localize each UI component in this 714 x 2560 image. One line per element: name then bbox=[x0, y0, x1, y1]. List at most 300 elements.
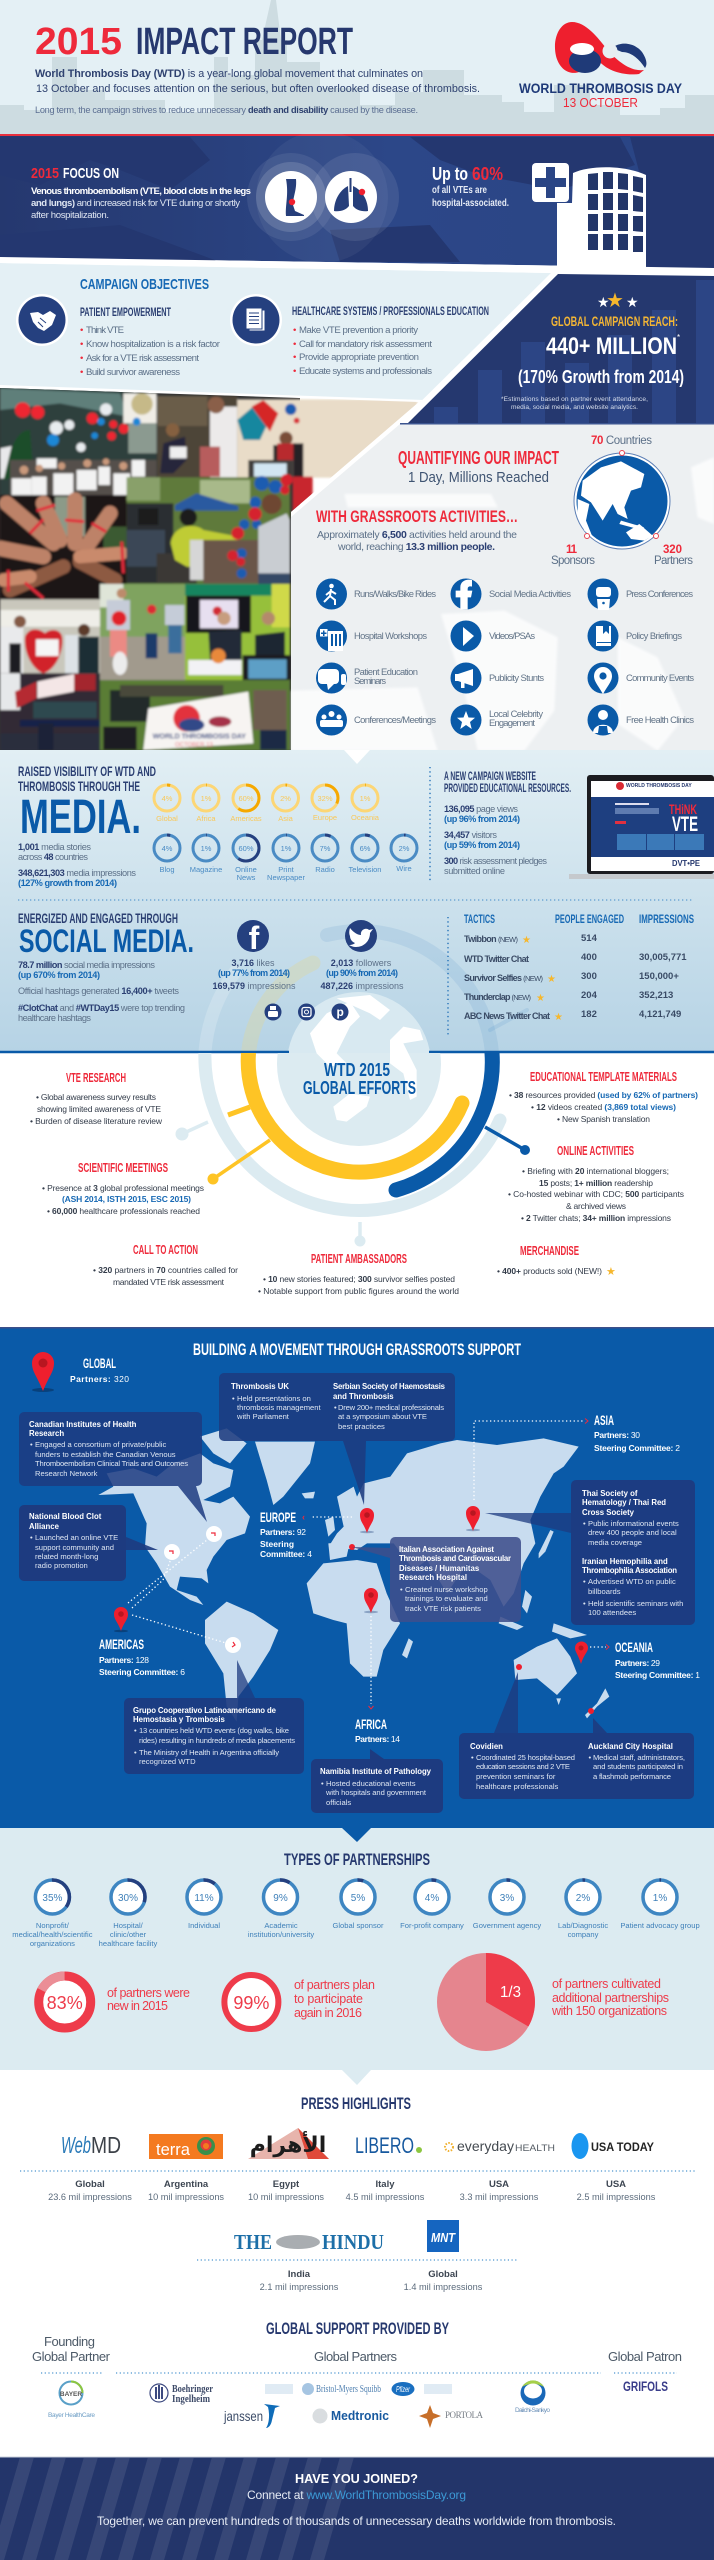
activity: hospital workshops bbox=[316, 620, 427, 652]
icon: twitter with stats: 2,013 followers bbox=[331, 958, 392, 968]
intro text: Long term, the campaign strives to reduce unnecessary death and disability caused by the disease. bbox=[35, 105, 418, 115]
objective: healthcare systems: • bbox=[293, 325, 296, 336]
callout: Italian Association: trainings to evaluate and bbox=[405, 1594, 488, 1603]
logo: Medtronic bbox=[312, 2408, 389, 2424]
callout: Thai and Iranian societies bbox=[485, 1480, 695, 1625]
objective: patient empowerment: • bbox=[80, 353, 83, 364]
activity: patient education seminars: Patient Education bbox=[354, 666, 418, 677]
activity: community events bbox=[588, 662, 694, 694]
callout: Covidien and Auckland City Hospital: prevention seminars for bbox=[476, 1772, 556, 1781]
intro text: 13 October and focuses attention on the serious, but often overlooked disease of thrombosis. bbox=[36, 83, 480, 95]
callout: National Blood Clot Alliance: Alliance bbox=[29, 1522, 60, 1531]
callout: Italian Association: track VTE risk patients bbox=[405, 1604, 481, 1613]
callout: Thrombosis UK and Serbian Society bbox=[219, 1373, 455, 1505]
callout: Grupo Cooperativo: • bbox=[134, 1748, 137, 1757]
title bbox=[35, 21, 353, 63]
chart: media by region: Americas bbox=[230, 814, 262, 823]
chart: media by region: Oceania bbox=[351, 813, 380, 822]
city skyline bbox=[0, 0, 714, 134]
chart: media by type: 60% bbox=[238, 844, 254, 853]
callout: Grupo Cooperativo: The Ministry of Health in Argentina officially bbox=[139, 1748, 279, 1757]
social tactics table: Survivor Selfies (NEW) bbox=[464, 973, 544, 983]
callout: Canadian Institutes: Research Network bbox=[35, 1469, 98, 1478]
icons: youtube instagram pinterest bbox=[264, 1004, 348, 1020]
globe top bbox=[287, 992, 431, 1136]
activity: social media bbox=[450, 578, 571, 610]
callout: Covidien and Auckland City Hospital: and students participated in bbox=[593, 1762, 683, 1771]
logo: terra bbox=[149, 2134, 223, 2159]
chart: 83% new partners: 83% bbox=[47, 1993, 83, 2013]
activity: runs walks bike rides bbox=[316, 578, 436, 610]
chart: partnership types: 4% bbox=[425, 1893, 439, 1904]
effort: scientific meetings: (ASH 2014, ISTH 2015, ESC 2015) bbox=[62, 1194, 191, 1204]
chart: media by type: Radio bbox=[315, 865, 335, 874]
reach figures: *Estimations based on partner event attendance, bbox=[501, 396, 648, 403]
media stats: across 48 countries bbox=[18, 852, 88, 862]
chart: partnership types: 5% bbox=[351, 1893, 365, 1904]
focus heading: 2015 bbox=[31, 165, 59, 182]
activity: press conferences bbox=[588, 578, 693, 610]
chart: media by region bbox=[154, 785, 380, 823]
icon: twitter with stats bbox=[320, 920, 404, 991]
callout: Covidien and Auckland City Hospital: healthcare professionals bbox=[476, 1782, 559, 1791]
media heading: MEDIA. bbox=[20, 791, 141, 844]
effort: merchandise bbox=[497, 1243, 616, 1278]
panel: global support bbox=[32, 2319, 682, 2428]
social tactics table: ★ bbox=[554, 1012, 563, 1023]
media stats: (127% growth from 2014) bbox=[18, 878, 117, 888]
globe with stats: 11 bbox=[566, 544, 578, 556]
social media stats: #ClotChat and #WTDay15 were top trending bbox=[18, 1003, 185, 1013]
chart: partnership types: company bbox=[568, 1930, 599, 1939]
efforts title: WTD 2015 bbox=[324, 1060, 390, 1080]
chart: media by region: 2% bbox=[280, 794, 291, 803]
laptop showing website: VTE bbox=[672, 813, 698, 836]
I billboard bbox=[0, 673, 100, 751]
icon: facebook with stats: 169,579 impressions bbox=[212, 981, 296, 991]
focus text bbox=[31, 186, 251, 221]
logo: The Hindu: HINDU bbox=[322, 2230, 384, 2254]
chart: media by region: 4% bbox=[162, 794, 173, 803]
logo: Portola bbox=[419, 2405, 484, 2428]
Oceania stat and pin: Steering Committee: 1 bbox=[615, 1670, 700, 1680]
chart: 99% return bbox=[224, 1975, 375, 2029]
chart: partnership types: healthcare facility bbox=[99, 1939, 158, 1948]
objective: healthcare systems bbox=[292, 306, 489, 377]
callout: National Blood Clot Alliance: related month-long bbox=[35, 1552, 98, 1561]
activity: press conferences: Press Conferences bbox=[626, 588, 693, 599]
logo: Daiichi-Sankyo: Daiichi-Sankyo bbox=[515, 2407, 550, 2414]
press figures row two: Global bbox=[428, 2269, 458, 2280]
callout: Thai and Iranian societies: media coverage bbox=[588, 1538, 642, 1547]
effort: scientific meetings: • Presence at 3 global professional meetings bbox=[42, 1183, 204, 1193]
grassroots heading: Approximately 6,500 activities held around the bbox=[317, 529, 517, 541]
activity: patient education seminars: Seminars bbox=[354, 675, 386, 686]
panel: types of partnerships bbox=[0, 1828, 714, 2085]
chart: partnership types: organizations bbox=[30, 1939, 75, 1948]
chart: one third pie: additional partnerships bbox=[552, 1991, 669, 2005]
activity: policy briefings: Policy Briefings bbox=[626, 630, 682, 641]
chart: partnership types: Government agency bbox=[473, 1921, 541, 1930]
chart: media by type: Blog bbox=[159, 865, 175, 874]
media heading: RAISED VISIBILITY OF WTD AND bbox=[18, 763, 156, 779]
callout: National Blood Clot Alliance: support community and bbox=[35, 1543, 114, 1552]
logo: Boehringer Ingelheim bbox=[150, 2383, 213, 2405]
chart: media by region: 60% bbox=[238, 794, 254, 803]
chart: 99% return: to participate bbox=[294, 1992, 363, 2006]
media heading bbox=[18, 763, 156, 844]
campaign website stats: PROVIDED EDUCATIONAL RESOURCES. bbox=[444, 783, 571, 795]
laptop showing website: DVT•PE bbox=[672, 859, 701, 868]
Europe stat: Steering bbox=[260, 1539, 294, 1549]
activity: community events: Community Events bbox=[626, 672, 694, 683]
social media stats: Official hashtags generated 16,400+ tweets bbox=[18, 986, 179, 996]
effort: patient ambassadors: • Notable support from public figures around the world bbox=[258, 1286, 459, 1296]
activity: conferences and meetings bbox=[316, 704, 436, 736]
media stats: 348,621,303 media impressions bbox=[18, 868, 136, 878]
icon: facebook with stats: f bbox=[249, 920, 260, 956]
icon: leg and lungs bbox=[247, 131, 399, 263]
Asia stat and pin: ASIA bbox=[594, 1412, 614, 1428]
callout: Covidien and Auckland City Hospital: • bbox=[588, 1753, 592, 1762]
icon: facebook with stats: 3,716 likes bbox=[231, 958, 275, 968]
chart: media by region: 1% bbox=[360, 794, 371, 803]
chart: partnership types: 2% bbox=[576, 1893, 590, 1904]
callout: Canadian Institutes: Research bbox=[29, 1429, 64, 1438]
efforts title bbox=[303, 1060, 416, 1098]
logo: Bristol-Myers Squibb and Pfizer: Pfizer bbox=[396, 2385, 410, 2394]
callout: Covidien and Auckland City Hospital: education sessions and 2 VTE bbox=[476, 1762, 570, 1771]
effort: online activities: • 2 Twitter chats; 34+ million impressions bbox=[521, 1213, 671, 1223]
logo: Al-Ahram: الأهرام bbox=[250, 2130, 326, 2158]
logo: everyday health: HEALTH bbox=[515, 2143, 555, 2154]
callout: Thai and Iranian societies: billboards bbox=[588, 1587, 621, 1596]
callout: Covidien and Auckland City Hospital bbox=[459, 1664, 694, 1799]
chart: one third pie: with 150 organizations bbox=[551, 2004, 667, 2018]
Asia stat and pin: Partners: 30 bbox=[594, 1430, 640, 1440]
social media stats: healthcare hashtags bbox=[18, 1013, 91, 1023]
chart: media by region: Global bbox=[156, 814, 178, 823]
logo: MNT: MNT bbox=[431, 2230, 456, 2245]
chart: media by type: 1% bbox=[281, 844, 292, 853]
reach figures: 440+ MILLION bbox=[546, 333, 677, 360]
callout: Italian Association bbox=[352, 1537, 521, 1622]
social media heading: ENERGIZED AND ENGAGED THROUGH bbox=[18, 910, 178, 926]
effort: online activities: • Briefing with 20 international bloggers; bbox=[522, 1166, 669, 1176]
global stat bbox=[32, 1352, 129, 1392]
campaign website stats bbox=[444, 771, 571, 876]
callout: Thrombosis UK and Serbian Society: Held presentations on bbox=[237, 1394, 311, 1403]
Europe stat: Committee: 4 bbox=[260, 1549, 312, 1559]
photo collage of campaign events: OCTOBER 13 bbox=[175, 743, 213, 749]
callout: Thrombosis UK and Serbian Society: • bbox=[334, 1403, 337, 1412]
chart: one third pie bbox=[437, 1953, 669, 2051]
objective: healthcare systems: • bbox=[293, 339, 296, 350]
callout: Italian Association: Italian Association Against bbox=[399, 1545, 494, 1554]
up to 60% stat bbox=[432, 164, 509, 209]
effort: call to action: mandated VTE risk assessment bbox=[113, 1277, 225, 1287]
social tactics table: 204 bbox=[581, 990, 598, 1001]
press figures row one: 10 mil impressions bbox=[148, 2192, 224, 2202]
chart: partnership types: Hospital/ bbox=[113, 1921, 144, 1930]
effort: VTE research: • Global awareness survey results bbox=[36, 1092, 156, 1102]
objective: patient empowerment: • bbox=[80, 339, 83, 350]
globe with stats: Partners bbox=[654, 555, 693, 567]
logo: World Thrombosis Day bbox=[519, 22, 682, 110]
chart: one third pie: of partners cultivated bbox=[552, 1977, 661, 1991]
callout: National Blood Clot Alliance bbox=[19, 1505, 158, 1581]
supporter tier labels bbox=[32, 2334, 682, 2364]
campaign website stats: (up 59% from 2014) bbox=[444, 840, 520, 850]
objective: patient empowerment bbox=[80, 307, 221, 378]
callout: Thai and Iranian societies: Thai Society of bbox=[582, 1489, 638, 1498]
logo: everyday health bbox=[445, 2138, 555, 2154]
globe with stats bbox=[551, 435, 693, 567]
Oceania stat and pin: OCEANIA bbox=[615, 1639, 653, 1655]
world map bbox=[98, 1428, 609, 1722]
chart: 83% new partners: of partners were bbox=[107, 1986, 190, 2000]
callout: National Blood Clot Alliance: radio promotion bbox=[35, 1561, 88, 1570]
logo: Portola: PORTOLA bbox=[445, 2410, 484, 2420]
chart: partnership types: 9% bbox=[273, 1893, 288, 1904]
press figures row one: Global bbox=[75, 2179, 105, 2190]
concentric rings and globe bbox=[176, 1053, 530, 1246]
callout: Thai and Iranian societies: Hematology / Thai Red bbox=[582, 1498, 666, 1507]
press figures row one bbox=[48, 2179, 656, 2202]
logo: World Thrombosis Day: 13 OCTOBER bbox=[563, 95, 638, 110]
supporter tier labels: Global Partner bbox=[32, 2349, 111, 2364]
chart: media by type: 6% bbox=[360, 844, 371, 853]
effort: merchandise: ★ bbox=[606, 1266, 616, 1278]
Europe stat: EUROPE bbox=[260, 1509, 296, 1525]
Oceania stat and pin: Partners: 29 bbox=[615, 1658, 660, 1668]
supporter tier labels: Global Partners bbox=[314, 2349, 398, 2364]
logo: Bayer: Bayer HealthCare bbox=[48, 2412, 95, 2419]
logo: Bayer: BAYER bbox=[60, 2391, 82, 2398]
social tactics table: ★ bbox=[522, 935, 531, 946]
focus heading bbox=[31, 165, 119, 182]
callout: National Blood Clot Alliance: National Blood Clot bbox=[29, 1512, 102, 1521]
logo: Boehringer Ingelheim: Ingelheim bbox=[172, 2393, 210, 2405]
globe with stats: 70 Countries bbox=[591, 435, 652, 447]
logo: The Hindu: THE bbox=[234, 2230, 272, 2254]
activity: patient education seminars bbox=[316, 662, 418, 694]
Asia stat and pin: Steering Committee: 2 bbox=[594, 1443, 680, 1453]
grassroots heading: WITH GRASSROOTS ACTIVITIES… bbox=[316, 507, 518, 526]
social tactics table: ABC News Twitter Chat bbox=[464, 1011, 550, 1021]
campaign website stats: submitted online bbox=[444, 866, 505, 876]
activity: local celebrity engagement: Engagement bbox=[489, 717, 535, 728]
activity: publicity stunts bbox=[450, 662, 544, 694]
Europe stat: Partners: 92 bbox=[260, 1527, 306, 1537]
icons: youtube instagram pinterest: p bbox=[336, 1005, 344, 1019]
E interview bbox=[127, 477, 290, 584]
objective: patient empowerment: Know hospitalization is a risk factor bbox=[86, 339, 221, 350]
callout: Canadian Institutes bbox=[19, 1412, 207, 1522]
logo: Janssen: janssen bbox=[223, 2408, 263, 2424]
Americas stat: Partners: 128 bbox=[99, 1655, 149, 1665]
activity icon grid bbox=[316, 578, 694, 736]
up to 60% stat: 60% bbox=[472, 164, 503, 184]
chart: partnership types: Patient advocacy group bbox=[620, 1921, 700, 1930]
logo: USA Today bbox=[572, 2133, 654, 2159]
activity: publicity stunts: Publicity Stunts bbox=[489, 672, 544, 683]
quantifying heading: 1 Day, Millions Reached bbox=[408, 469, 549, 486]
effort: online activities bbox=[508, 1143, 684, 1223]
activity: runs walks bike rides: Runs/Walks/Bike Rides bbox=[354, 588, 436, 599]
panel: 2015 focus on bbox=[0, 131, 714, 270]
G park bbox=[98, 582, 187, 638]
icon: three stars: ★ bbox=[606, 290, 624, 312]
objective: patient empowerment: PATIENT EMPOWERMENT bbox=[80, 307, 171, 319]
B child bbox=[157, 396, 237, 478]
activity: local celebrity engagement bbox=[450, 704, 543, 736]
callout: Thrombosis UK and Serbian Society: best practices bbox=[338, 1422, 385, 1431]
campaign website stats: (up 96% from 2014) bbox=[444, 814, 520, 824]
social tactics table: TACTICS bbox=[464, 914, 495, 926]
campaign website stats: 300 risk assessment pledges bbox=[444, 856, 547, 866]
chart: partnership types bbox=[12, 1880, 700, 1948]
callout: Canadian Institutes: Canadian Institutes of Health bbox=[29, 1420, 137, 1429]
media stats: 1,001 media stories bbox=[18, 842, 91, 852]
chart: partnership types: Nonprofit/ bbox=[36, 1921, 70, 1930]
Europe stat bbox=[260, 1509, 352, 1559]
press figures row two: 1.4 mil impressions bbox=[404, 2282, 483, 2292]
reach figures: media, social media, and website analytics. bbox=[511, 404, 638, 411]
callout: Grupo Cooperativo: rides) resulting in hundreds of media placements bbox=[139, 1736, 295, 1745]
chart: partnership types: clinic/other bbox=[110, 1930, 147, 1939]
laptop showing website bbox=[569, 775, 714, 879]
press figures row two: 2.1 mil impressions bbox=[260, 2282, 339, 2292]
objective: healthcare systems: Make VTE prevention a priority bbox=[299, 325, 418, 336]
effort: VTE research: showing limited awareness of VTE bbox=[37, 1104, 161, 1114]
partnerships heading: TYPES OF PARTNERSHIPS bbox=[284, 1850, 430, 1869]
header panel bbox=[0, 0, 714, 136]
social tactics table: ★ bbox=[547, 974, 556, 985]
footer text: HAVE YOU JOINED? bbox=[295, 2471, 418, 2486]
reach figures bbox=[501, 313, 684, 411]
photo collage of campaign events bbox=[0, 380, 417, 755]
effort: call to action: • 320 partners in 70 countries called for bbox=[93, 1265, 238, 1275]
effort: scientific meetings bbox=[42, 1160, 204, 1216]
icon: twitter with stats: (up 90% from 2014) bbox=[326, 968, 398, 978]
logo: WebMD: Web bbox=[61, 2132, 91, 2158]
up to 60% stat: Up to bbox=[432, 164, 468, 184]
activity: local celebrity engagement: Local Celebrity bbox=[489, 708, 543, 719]
icon: three stars bbox=[597, 290, 639, 312]
social tactics table: 30,005,771 bbox=[639, 952, 687, 963]
logo: MNT bbox=[427, 2220, 459, 2252]
D hands bbox=[0, 495, 127, 600]
map markers: Americas bbox=[114, 1526, 241, 1653]
callout: Namibia Institute: with hospitals and government bbox=[325, 1788, 427, 1797]
callout: Namibia Institute: Namibia Institute of Pathology bbox=[320, 1767, 432, 1776]
reach figures: * bbox=[677, 333, 680, 342]
social media stats bbox=[18, 960, 185, 1023]
campaign website stats: A NEW CAMPAIGN WEBSITE bbox=[444, 771, 536, 783]
title: 2015 bbox=[35, 21, 122, 63]
chart: partnership types: Lab/Diagnostic bbox=[558, 1921, 608, 1930]
chart: partnership types: 35% bbox=[42, 1893, 63, 1904]
grassroots heading bbox=[316, 507, 518, 553]
chart: partnership types: medical/health/scientific bbox=[12, 1930, 93, 1939]
title: IMPACT REPORT bbox=[136, 21, 353, 63]
press figures row one: USA bbox=[606, 2179, 626, 2190]
callout: Thai and Iranian societies: • bbox=[583, 1519, 586, 1528]
callout: Thrombosis UK and Serbian Society: • bbox=[232, 1394, 235, 1403]
supporter tier labels: Global Patron bbox=[608, 2349, 682, 2364]
chart: media by region: Europe bbox=[313, 813, 337, 822]
focus text: Venous thromboembolism (VTE, blood clots in the legs bbox=[31, 186, 251, 197]
callout: Thai and Iranian societies: Held scientific seminars with bbox=[588, 1599, 683, 1608]
press figures row one: Egypt bbox=[273, 2179, 300, 2190]
chart: 99% return: 99% bbox=[233, 1993, 269, 2013]
H TV studio bbox=[185, 584, 290, 680]
logo: terra: terra bbox=[156, 2140, 191, 2159]
chart: 99% return: again in 2016 bbox=[294, 2006, 362, 2020]
effort: call to action: CALL TO ACTION bbox=[133, 1242, 198, 1257]
chart: media by type: Wire bbox=[396, 864, 412, 873]
effort: patient ambassadors bbox=[258, 1251, 459, 1296]
Americas stat: Steering Committee: 6 bbox=[99, 1667, 185, 1677]
chart: media by type: 4% bbox=[162, 844, 173, 853]
callout: National Blood Clot Alliance: Launched an online VTE bbox=[35, 1533, 118, 1542]
social tactics table: Twibbon (NEW) bbox=[464, 934, 518, 944]
footer text: Together, we can prevent hundreds of thousands of unnecessary deaths worldwide from thrombosis. bbox=[97, 2514, 616, 2528]
callout: Thai and Iranian societies: Cross Society bbox=[582, 1508, 635, 1517]
press figures row one: 10 mil impressions bbox=[248, 2192, 324, 2202]
callout: Covidien and Auckland City Hospital: Medical staff, administrators, bbox=[593, 1753, 685, 1762]
social tactics table: Thunderclap (NEW) bbox=[464, 992, 532, 1002]
callout: Thai and Iranian societies: Public informational events bbox=[588, 1519, 679, 1528]
ghost rings behind social stats bbox=[205, 931, 527, 1053]
activity: videos and PSAs bbox=[450, 620, 535, 652]
effort: patient ambassadors: • 10 new stories featured; 300 survivor selfies posted bbox=[263, 1274, 455, 1284]
focus text: after hospitalization. bbox=[31, 210, 109, 221]
campaign website stats: 136,095 page views bbox=[444, 804, 518, 814]
map title: BUILDING A MOVEMENT THROUGH GRASSROOTS SUPPORT bbox=[193, 1341, 521, 1359]
Africa stat and pin: AFRICA bbox=[355, 1716, 387, 1732]
Europe stat: ‹ bbox=[302, 1512, 305, 1522]
effort: online activities: 15 posts; 1+ million readership bbox=[539, 1178, 653, 1188]
objectives heading: CAMPAIGN OBJECTIVES bbox=[80, 276, 209, 293]
callout: Grupo Cooperativo: Hemostasia y Trombosis bbox=[133, 1715, 226, 1724]
Americas stat bbox=[99, 1636, 185, 1677]
activity: videos and PSAs: Videos/PSAs bbox=[489, 630, 535, 641]
activity: free health clinics: Free Health Clinics bbox=[626, 714, 694, 725]
logo: Boehringer Ingelheim: Boehringer bbox=[172, 2383, 213, 2395]
chart: 83% new partners bbox=[29, 1967, 190, 2037]
social tactics table: 300 bbox=[581, 971, 597, 982]
social tactics table: WTD Twitter Chat bbox=[464, 954, 529, 964]
global stat: GLOBAL bbox=[83, 1356, 116, 1371]
chart: media by region: 1% bbox=[201, 794, 212, 803]
effort: VTE research: • Burden of disease literature review bbox=[30, 1116, 163, 1126]
effort: educational template materials bbox=[509, 1069, 698, 1124]
callout: Italian Association: Research Hospital bbox=[399, 1573, 467, 1582]
objective: healthcare systems: Educate systems and professionals bbox=[299, 366, 432, 377]
callout: Italian Association: Created nurse workshop bbox=[405, 1585, 488, 1594]
Asia stat and pin bbox=[466, 1412, 680, 1531]
globe with stats: 320 bbox=[663, 544, 682, 556]
chart: media by type: Newspaper bbox=[267, 873, 305, 882]
chart: media by type bbox=[154, 835, 417, 882]
logo: Bristol-Myers Squibb and Pfizer bbox=[265, 2382, 452, 2396]
focus heading: FOCUS ON bbox=[63, 165, 119, 182]
chart: media by type: 1% bbox=[201, 844, 212, 853]
logo: WebMD: MD bbox=[91, 2132, 121, 2158]
press figures row one: Italy bbox=[375, 2179, 395, 2190]
